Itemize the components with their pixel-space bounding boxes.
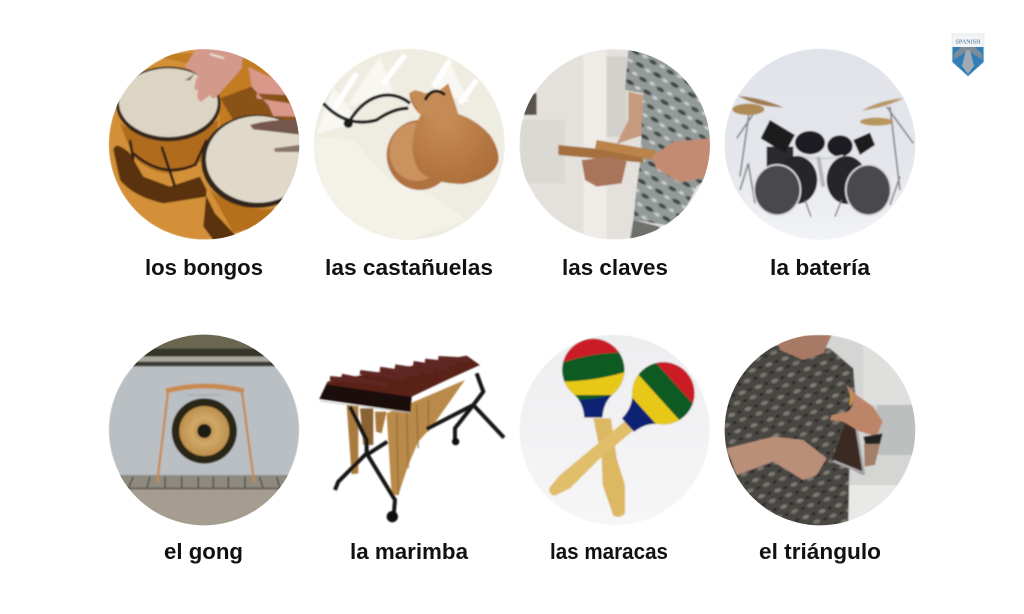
label: las castañuelas: las castañuelas bbox=[325, 255, 493, 280]
logo: shield: SPANISH bbox=[955, 38, 981, 46]
photo: las claves bbox=[519, 48, 713, 245]
logo: shield bbox=[952, 34, 984, 77]
label: la batería: la batería bbox=[770, 255, 871, 280]
label: el triángulo: el triángulo bbox=[759, 539, 881, 564]
photo: los bongos bbox=[109, 48, 312, 240]
photo: la batería bbox=[724, 49, 916, 240]
photo: el triángulo bbox=[723, 332, 917, 532]
label: el gong: el gong bbox=[164, 539, 243, 564]
photo: la marimba bbox=[319, 356, 504, 522]
label: la marimba: la marimba bbox=[350, 539, 469, 564]
label: las claves: las claves bbox=[562, 255, 668, 280]
label: las maracas: las maracas bbox=[550, 539, 668, 564]
photo: las castañuelas bbox=[313, 49, 505, 243]
label: los bongos: los bongos bbox=[145, 255, 263, 280]
photo: el gong bbox=[107, 332, 303, 528]
photo: las maracas bbox=[519, 335, 710, 525]
